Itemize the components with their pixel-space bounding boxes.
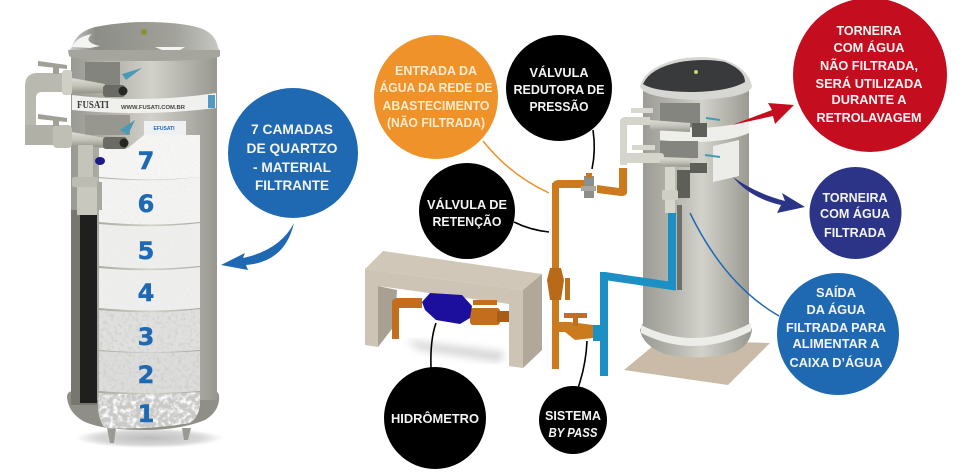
callout: sistema by pass: [539, 386, 607, 454]
white PVC pipes right: [620, 108, 690, 213]
top cap: [141, 29, 147, 35]
callout: válvula de retenção: [419, 163, 515, 259]
upper valve dark fittings: [85, 62, 120, 86]
callout: entrada da água: ABASTECIMENTO: [382, 98, 490, 113]
floor shadow: [75, 428, 223, 448]
right tank body: [640, 90, 752, 358]
teal marks: [705, 118, 720, 157]
callout: hidrômetro: [384, 367, 486, 469]
right tank sticker: [713, 140, 739, 182]
leader: by pass: [578, 341, 587, 388]
callout: saída da água filtrada: [777, 273, 899, 395]
callout: hidrômetro: HIDRÔMETRO: [391, 411, 479, 426]
callout: torneira com água filtrada: COM ÁGUA: [820, 206, 891, 221]
lower valve fittings: [85, 115, 130, 135]
layer 2: [99, 351, 200, 393]
dome lid: [68, 22, 220, 52]
callout: 7 camadas de quartzo: 7 CAMADAS: [251, 121, 333, 137]
layer 1: [98, 392, 200, 428]
arrow: navy: [733, 177, 805, 213]
layer numbers: 7: [138, 147, 154, 175]
layer numbers: 5: [138, 237, 154, 265]
orange inlet pipes: [547, 168, 627, 369]
callout: válvula de retenção: VÁLVULA DE: [427, 197, 507, 212]
right tank label band: [660, 120, 749, 142]
callout: 7 camadas de quartzo: DE QUARTZO: [246, 140, 338, 156]
dome highlights: [72, 34, 185, 50]
callout: sistema by pass: SISTEMA: [545, 408, 602, 423]
right tank: [640, 57, 752, 358]
leader: entrada: [483, 141, 549, 193]
callout: torneira com água não filtrada: DURANTE A: [832, 92, 907, 107]
callout: entrada da água: (NÃO FILTRADA): [387, 115, 485, 130]
left filter tank cutaway: WWW.FUSATI.COM.BR: [121, 105, 185, 111]
callout: torneira com água filtrada: TORNEIRA: [822, 190, 888, 205]
tank bottom: [67, 391, 219, 430]
hidrometer blue body: [422, 293, 472, 324]
dark inner strip: [71, 210, 97, 405]
callout: saída da água filtrada: SAÍDA: [816, 285, 857, 300]
arrow: to filter layers: [221, 223, 294, 270]
callout: torneira com água não filtrada: NÃO FILTRADA,: [820, 58, 918, 73]
right filter tank base plate: [624, 340, 770, 385]
layer numbers: 1: [138, 400, 154, 428]
callout: entrada da água: [374, 35, 498, 159]
callout: torneira com água não filtrada: TORNEIRA: [836, 23, 902, 38]
callout: entrada da água: ÁGUA DA REDE DE: [380, 80, 493, 95]
tank feet: [107, 428, 191, 443]
layer 4: [99, 267, 200, 310]
layer 5: [99, 223, 200, 268]
arrow: red: [732, 103, 794, 125]
leader: saída: [690, 213, 779, 316]
tank body: [71, 55, 217, 400]
callout: torneira com água não filtrada: COM ÁGUA: [834, 40, 905, 55]
white label band: [72, 93, 216, 113]
callout: válvula redutora: PRESSÃO: [530, 99, 588, 114]
callout: válvula redutora: [506, 35, 612, 141]
callout: 7 camadas de quartzo: [228, 88, 358, 218]
left valve nozzles: [95, 85, 128, 165]
pressure reducing valve: [581, 173, 596, 198]
left filter tank cutaway: [25, 22, 223, 448]
callout: saída da água filtrada: CAIXA D’ÁGUA: [790, 355, 883, 370]
callout: torneira com água não filtrada: RETROLAVAGEM: [816, 110, 922, 125]
callout: válvula de retenção: RETENÇÃO: [432, 214, 502, 229]
cutaway label: [144, 121, 186, 137]
blue outlet pipe: [604, 213, 672, 376]
leader: retenção: [514, 222, 549, 232]
callout: saída da água filtrada: DA ÁGUA: [806, 302, 866, 317]
callout: torneira com água filtrada: FILTRADA: [824, 225, 887, 240]
layer numbers: 4: [138, 279, 154, 307]
callout: válvula redutora: VÁLVULA: [530, 65, 589, 80]
concrete meter box: [365, 251, 542, 368]
brand text: FUSATI: [77, 99, 109, 111]
callout: sistema by pass: BY PASS: [548, 425, 598, 440]
blue bypass coupling: [593, 325, 608, 341]
layer 6: [99, 177, 200, 224]
layer numbers: 6: [138, 190, 154, 218]
callout: 7 camadas de quartzo: - MATERIAL: [253, 159, 331, 175]
layer numbers: 3: [138, 323, 154, 351]
layer numbers: 2: [138, 361, 154, 389]
layer 7: [99, 135, 200, 180]
callout: torneira com água filtrada: [810, 167, 902, 259]
meter pipes: [392, 298, 509, 339]
callout: saída da água filtrada: ALIMENTAR A: [792, 336, 880, 351]
callout: saída da água filtrada: FILTRADA PARA: [786, 320, 887, 335]
leader: redutora: [592, 130, 594, 169]
layer numbers: [138, 147, 154, 428]
blue logo: [208, 95, 215, 108]
leader: hidrômetro: [431, 323, 436, 368]
callout: válvula redutora: REDUTORA DE: [514, 82, 605, 97]
dark valve blocks: [660, 103, 700, 158]
lid rim: [68, 50, 220, 61]
lower rim: [641, 323, 751, 346]
left filter tank cutaway: EFUSATI: [153, 126, 175, 132]
callout: torneira com água não filtrada: SERÁ UTILIZADA: [816, 76, 923, 91]
layer 3: [99, 309, 200, 352]
callout: torneira com água não filtrada: [793, 0, 947, 152]
right tank dome: [640, 57, 752, 100]
callout: entrada da água: ENTRADA DA: [395, 63, 478, 78]
left PVC pipes: [25, 61, 105, 215]
callout: 7 camadas de quartzo: FILTRANTE: [255, 177, 329, 193]
